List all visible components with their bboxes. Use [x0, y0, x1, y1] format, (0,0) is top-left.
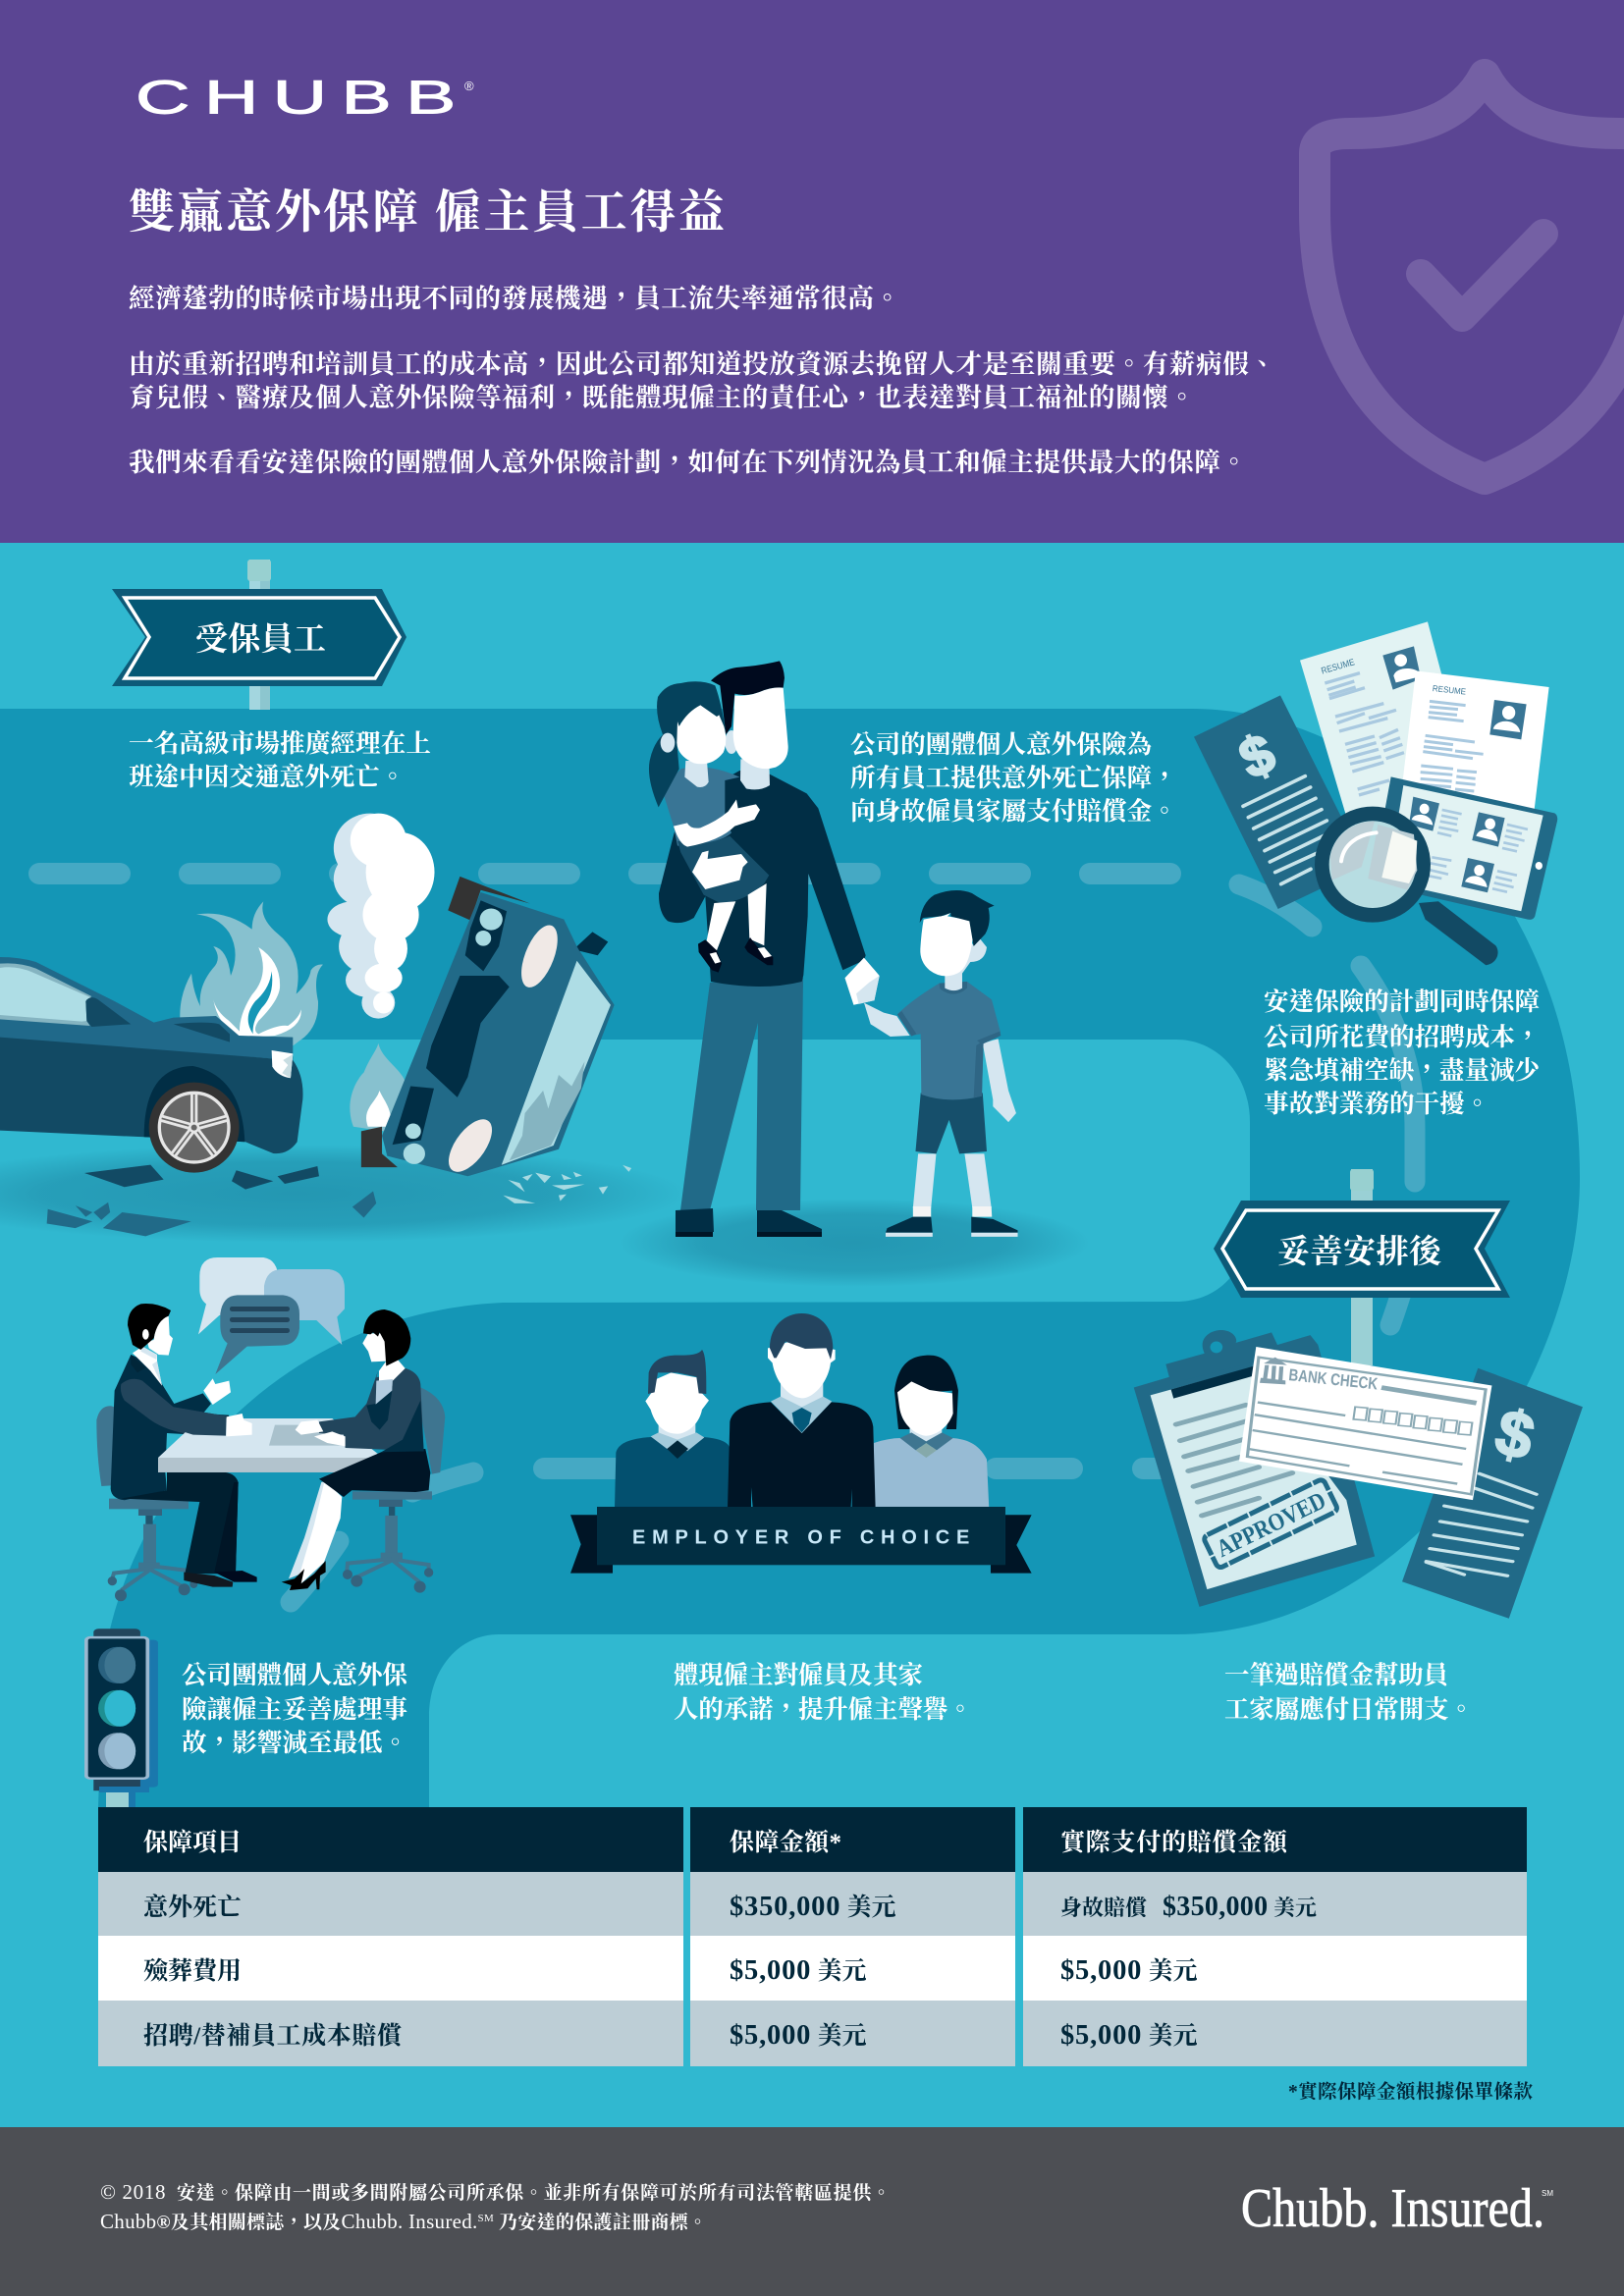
wheel — [149, 1083, 240, 1173]
table row: recruitment: $5,000 美元 — [1060, 2020, 1197, 2051]
glass debris — [503, 1165, 631, 1203]
banner — [570, 1507, 1032, 1574]
text block: intro: 育兒假、醫療及個人意外保險等福利，既能體現僱主的責任心，也表達對員工福祉的關懷。 — [129, 383, 1195, 412]
text block: intro — [129, 284, 1275, 477]
table row: funeral: $5,000 美元 — [1060, 1955, 1197, 1986]
table: coverage — [98, 1807, 1527, 2066]
daughter shoes — [698, 937, 773, 973]
text block: family support: 一筆過賠償金幫助員 — [1224, 1661, 1449, 1689]
woman chair — [343, 1387, 445, 1593]
table row: accidental death: 意外死亡 — [143, 1893, 242, 1921]
sign text: 受保員工 — [195, 621, 326, 658]
daughter dress — [662, 767, 739, 846]
father face — [733, 687, 788, 769]
table row: funeral: $5,000 美元 — [730, 1955, 866, 1986]
resume back — [1300, 621, 1473, 818]
resume front — [1401, 670, 1549, 818]
boy neck and ear — [945, 939, 987, 990]
debris near car — [84, 1165, 319, 1190]
table row: accidental death — [98, 1872, 1527, 1936]
woman — [282, 1309, 430, 1590]
text block: recruitment cost: 安達保險的計劃同時保障 — [1264, 988, 1540, 1016]
resume back: RESUME — [1320, 657, 1356, 676]
text block: recruitment cost: 緊急填補空缺，盡量減少 — [1264, 1056, 1541, 1085]
logo: Chubb. Insured.: Chubb. Insured. — [1241, 2178, 1544, 2239]
document right — [1402, 1368, 1583, 1619]
text block: recruitment cost: 公司所花費的招聘成本， — [1264, 1022, 1541, 1051]
icon: shield with check — [1315, 75, 1624, 479]
legal text: 乃安達的保護註冊商標。 — [494, 2212, 707, 2233]
text block: employer handling: 故，影響減至最低。 — [182, 1729, 407, 1757]
text block: intro: 我們來看看安達保險的團體個人意外保險計劃，如何在下列情況為員工和僱主提供最大的保障。 — [129, 448, 1247, 477]
resume front: RESUME — [1432, 683, 1467, 697]
logo: Chubb. Insured.: SM — [1542, 2189, 1553, 2198]
father hand — [692, 851, 748, 889]
banner: EMPLOYER OF CHOICE — [632, 1527, 969, 1549]
text block: family support — [1224, 1661, 1474, 1724]
text block: payout — [850, 729, 1177, 826]
table row: funeral: 殮葬費用 — [143, 1957, 242, 1985]
icon: signpost right — [1214, 1169, 1510, 1365]
text block: payout: 所有員工提供意外死亡保障， — [850, 763, 1177, 792]
ground shadow: accident — [0, 1145, 687, 1243]
speech bubbles — [198, 1257, 345, 1374]
boy hair — [920, 890, 995, 946]
person centre — [728, 1313, 876, 1509]
text block: employer handling: 公司團體個人意外保 — [182, 1660, 409, 1689]
table row: recruitment: 招聘/替補員工成本賠償 — [143, 2021, 405, 2050]
logo: CHUBB: ® — [464, 79, 474, 93]
flames back — [180, 901, 323, 1047]
icon: traffic light — [86, 1629, 158, 1790]
traffic light pole — [99, 1787, 149, 1807]
table — [158, 1418, 383, 1472]
text block: insured employee — [129, 728, 431, 791]
text block: family support: 工家屬應付日常開支。 — [1224, 1695, 1474, 1724]
daughter face — [677, 705, 726, 764]
table header: 保障金額* — [730, 1829, 841, 1856]
ground shadow: family — [619, 1199, 1090, 1287]
illustration: father trousers — [676, 978, 822, 1237]
daughter legs — [706, 883, 767, 950]
logo: CHUBB: CHUBB — [135, 71, 470, 124]
daughter neck — [684, 761, 709, 787]
table row: accidental death: $350,000 美元 — [1163, 1892, 1317, 1922]
table row: accidental death: 身故賠償 — [1060, 1896, 1150, 1920]
man sleeve over table — [167, 1407, 252, 1436]
illustration: father holding daughter — [649, 661, 866, 987]
text block: employer handling: 險讓僱主妥善處理事 — [182, 1695, 407, 1724]
daughter arm — [674, 799, 760, 847]
cheque — [1239, 1347, 1491, 1500]
boy shirt — [897, 982, 1001, 1099]
stamp: approved: APPROVED — [1213, 1487, 1330, 1563]
boy arm — [864, 1003, 910, 1037]
tablet — [1372, 776, 1557, 920]
man chair — [108, 1499, 197, 1601]
table row: accidental death: $350,000 美元 — [730, 1892, 896, 1922]
text block: employer handling — [182, 1660, 409, 1757]
daughter hair — [649, 681, 726, 807]
text block: insured employee: 班途中因交通意外死亡。 — [129, 762, 406, 791]
table header: 實際支付的賠償金額 — [1060, 1828, 1289, 1856]
legal text — [100, 2180, 891, 2233]
illustration: employer of choice group — [570, 1313, 1032, 1574]
text block: intro: 由於重新招聘和培訓員工的成本高，因此公司都知道投放資源去挽留人才是至關重要。有薪病假、 — [129, 349, 1275, 379]
text block: employer reputation: 體現僱主對僱員及其家 — [674, 1661, 923, 1689]
title: 雙贏意外保障 僱主員工得益 — [129, 187, 725, 239]
panel: teal background — [0, 543, 1624, 2127]
text block: recruitment cost: 事故對業務的干擾。 — [1264, 1090, 1489, 1118]
person right — [873, 1356, 989, 1509]
table row: recruitment: $5,000 美元 — [730, 2020, 866, 2051]
legal text: SM — [478, 2213, 494, 2224]
document with dollar sign — [1194, 695, 1367, 909]
illustration: claim documents — [1134, 1330, 1583, 1619]
text block: insured employee: 一名高級市場推廣經理在上 — [129, 728, 431, 758]
panel: footer — [0, 2127, 1624, 2296]
icon: signpost left — [112, 560, 406, 710]
illustration: resumes, tablet and magnifier — [1194, 621, 1557, 965]
illustration: business meeting — [96, 1257, 445, 1601]
table row: recruitment — [98, 2001, 1527, 2066]
illustration: overturned car — [350, 877, 631, 1203]
table header: 保障項目 — [143, 1829, 242, 1856]
label: bank check: BANK CHECK — [1288, 1365, 1380, 1394]
boy face — [920, 913, 973, 976]
father neck and ear — [740, 759, 770, 789]
text block: payout: 公司的團體個人意外保險為 — [850, 729, 1152, 759]
sign text: 妥善安排後 — [1277, 1234, 1443, 1270]
text block: recruitment cost — [1264, 988, 1541, 1118]
table row: funeral — [98, 1936, 1527, 2001]
debris — [47, 1191, 376, 1236]
legal text: Chubb®及其相關標誌，以及Chubb. Insured. — [100, 2210, 477, 2233]
text block: payout: 向身故僱員家屬支付賠償金。 — [850, 797, 1177, 826]
man — [96, 1304, 257, 1601]
text block: employer reputation: 人的承諾，提升僱主聲譽。 — [674, 1695, 973, 1724]
legal text: © 2018 安達。保障由一間或多間附屬公司所承保。並非所有保障可於所有司法管轄區提供。 — [100, 2180, 891, 2204]
table header — [98, 1807, 1527, 1872]
panel: purple header — [0, 0, 1624, 543]
person left — [615, 1350, 730, 1509]
flames front — [213, 947, 301, 1038]
icon: dollar sign: $ — [1489, 1395, 1542, 1473]
road dashes — [28, 863, 1415, 1602]
clipboard — [1134, 1330, 1375, 1607]
text block: intro: 經濟蓬勃的時候市場出現不同的發展機遇，員工流失率通常很高。 — [129, 284, 900, 313]
shirt — [659, 771, 866, 987]
document with dollar sign: $ — [1230, 722, 1284, 791]
footnote: *實際保障金額根據保單條款 — [1288, 2080, 1533, 2103]
road — [0, 709, 1580, 1807]
text block: employer reputation — [674, 1661, 973, 1724]
illustration: smoke — [327, 814, 434, 1019]
magnifier — [1315, 807, 1498, 965]
illustration: burning car — [0, 901, 323, 1190]
illustration: boy — [844, 890, 1018, 1237]
father hair — [711, 661, 785, 734]
